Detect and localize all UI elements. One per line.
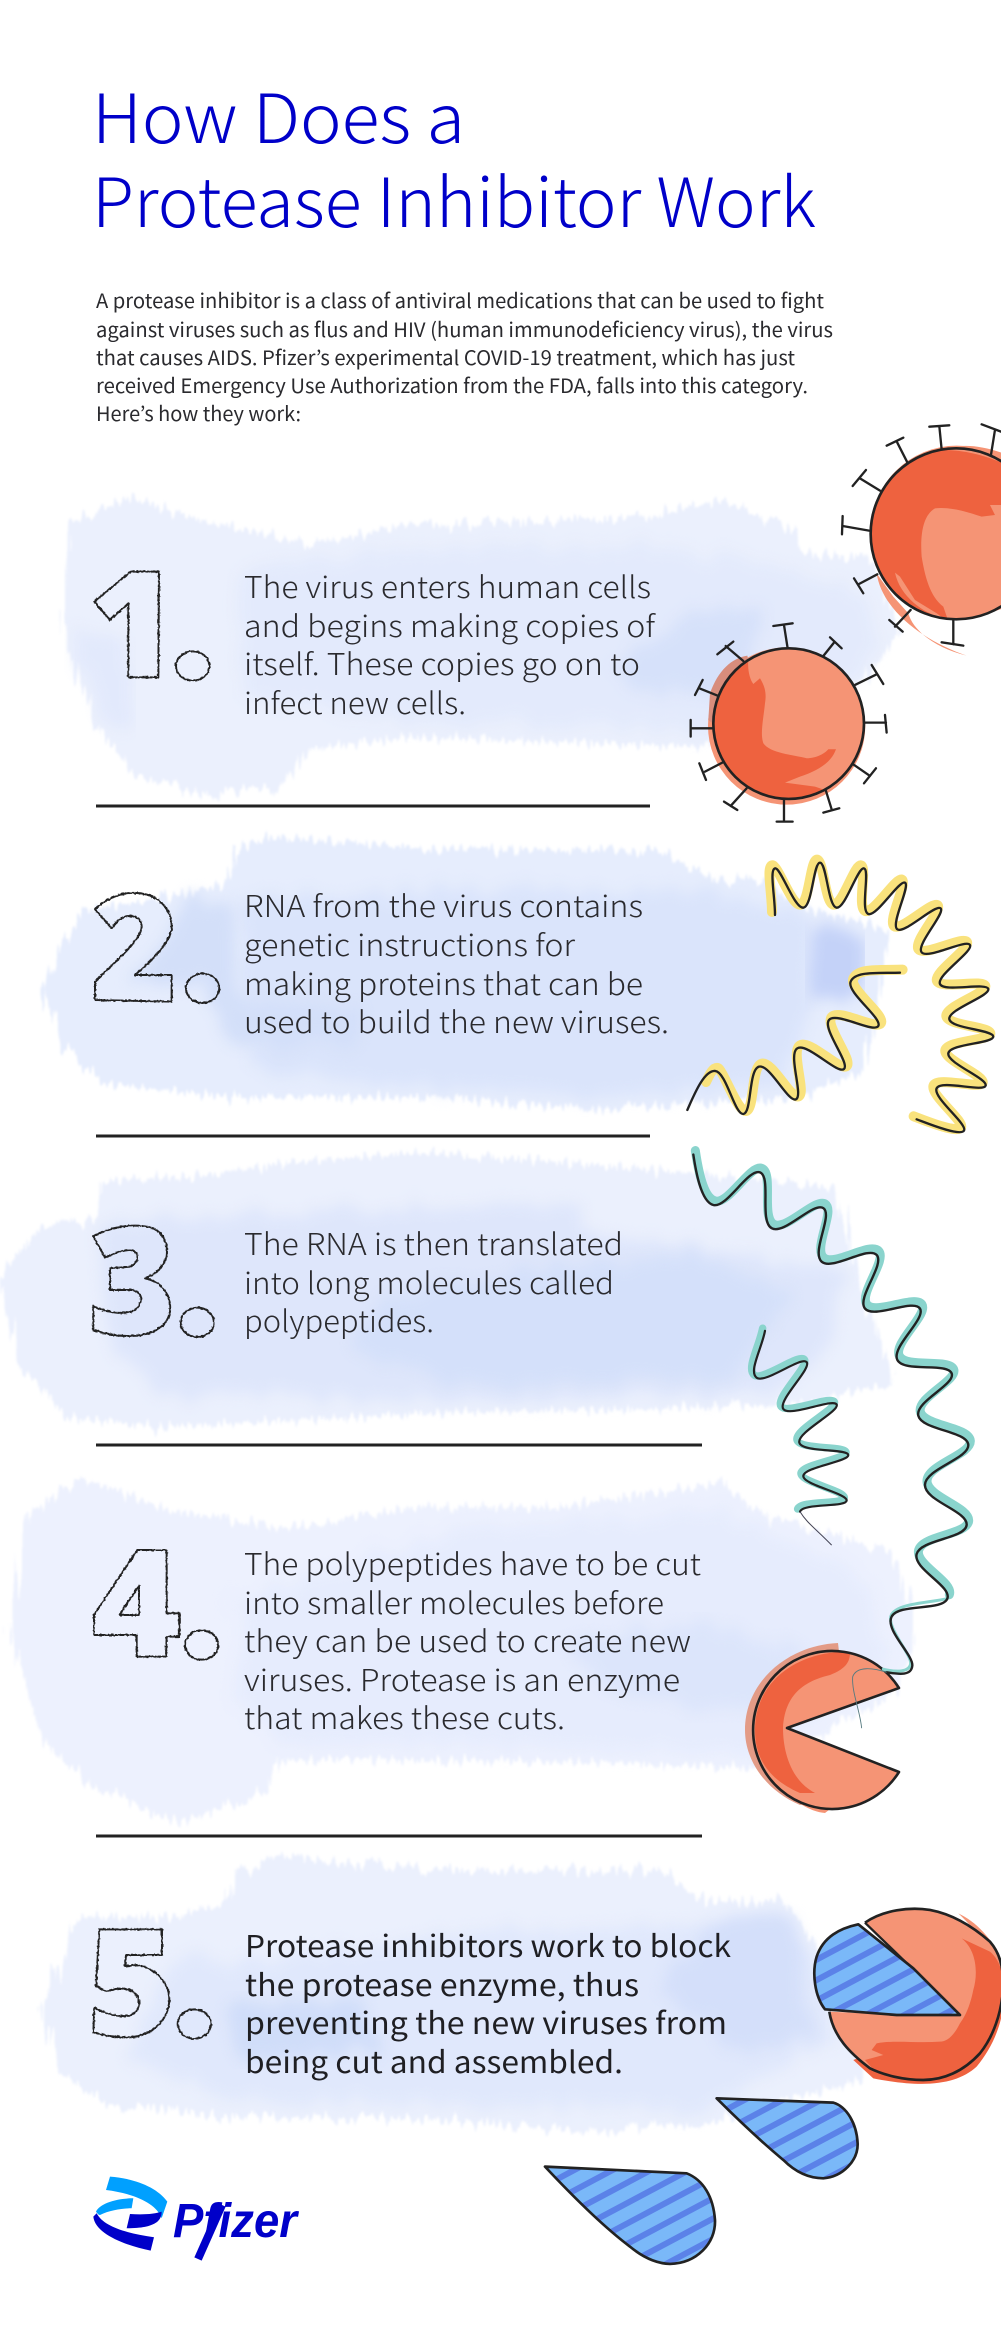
icon: inhibitor drop lower <box>545 2167 715 2264</box>
step 3 text: The RNA is then translated <box>244 1220 623 1264</box>
step 3 text: polypeptides. <box>244 1297 434 1341</box>
step 5 text: the protease enzyme, thus <box>245 1961 639 2005</box>
watercolor brush 2 <box>42 837 887 1110</box>
step 1 text: and begins making copies of <box>244 602 656 646</box>
numeral 3 <box>93 1226 214 1337</box>
step 5 text: preventing the new viruses from <box>245 1999 727 2043</box>
panel: step 2 <box>42 837 887 1136</box>
intro paragraph: that causes AIDS. Pfizer’s experimental COVID-19 treatment, which has just <box>96 342 795 371</box>
watercolor brush 1 <box>61 497 900 797</box>
step 4 text: they can be used to create new <box>244 1617 691 1661</box>
watercolor brush 5 <box>42 1857 862 2133</box>
icon: virus lower left <box>691 623 887 822</box>
step 5 text: being cut and assembled. <box>245 2038 623 2082</box>
step 3 text <box>244 1220 623 1341</box>
numeral 2 <box>95 893 219 1003</box>
title: Protease Inhibitor Work <box>92 148 816 247</box>
logo: Pfizer: Pfizer <box>173 2195 299 2248</box>
blue inhibitor wedge <box>814 1924 960 2015</box>
step 1 text: infect new cells. <box>244 679 466 723</box>
step 3 text: into long molecules called <box>244 1259 614 1303</box>
icon: teal polypeptide strand short <box>752 1328 848 1545</box>
step 5 text: Protease inhibitors work to block <box>245 1922 731 1966</box>
numeral 4 <box>94 1550 218 1660</box>
watercolor brush 3 <box>0 1153 894 1427</box>
icon: inhibitor drop middle <box>717 2098 858 2178</box>
step 2 text: making proteins that can be <box>244 960 643 1004</box>
step 4 text: into smaller molecules before <box>244 1579 664 1623</box>
step 4 text: The polypeptides have to be cut <box>244 1540 701 1584</box>
icon: teal polypeptide strand long <box>693 1151 970 1728</box>
numeral 5 <box>93 1929 211 2039</box>
step 5 text <box>245 1922 731 2082</box>
panel: step 5 <box>42 1857 862 2133</box>
title <box>92 64 816 247</box>
watercolor brush 4 <box>10 1477 916 1823</box>
panel: step 1 <box>61 497 900 806</box>
step 2 text: used to build the new viruses. <box>244 998 669 1042</box>
intro paragraph <box>96 285 833 427</box>
icon: pacman protease enzyme <box>745 1643 899 1813</box>
numeral 1 <box>94 572 209 681</box>
panel: step 3 <box>0 1153 894 1445</box>
intro paragraph: Here’s how they work: <box>96 398 301 427</box>
intro paragraph: against viruses such as flus and HIV (human immunodeficiency virus), the virus <box>96 314 833 343</box>
title: How Does a <box>92 64 465 163</box>
step 2 text: RNA from the virus contains <box>244 882 643 926</box>
panel: step 4 <box>10 1477 916 1836</box>
intro paragraph: received Emergency Use Authorization from the FDA, falls into this category. <box>96 370 808 399</box>
intro paragraph: A protease inhibitor is a class of antiviral medications that can be used to fight <box>96 285 824 314</box>
step 4 text <box>244 1540 701 1738</box>
logo: Pfizer <box>93 2177 299 2259</box>
icon: yellow RNA strand long <box>769 860 993 1132</box>
step 1 text: itself. These copies go on to <box>244 640 640 684</box>
icon: protease with inhibitor in its mouth <box>814 1909 1001 2084</box>
step 4 text: that makes these cuts. <box>244 1694 565 1738</box>
step 1 text <box>244 563 656 723</box>
step 1 text: The virus enters human cells <box>244 563 651 607</box>
icon: virus upper right <box>842 424 1001 656</box>
step 2 text <box>244 882 669 1042</box>
step 2 text: genetic instructions for <box>244 921 575 965</box>
step 4 text: viruses. Protease is an enzyme <box>244 1656 680 1700</box>
icon: yellow RNA strand short <box>687 970 903 1114</box>
